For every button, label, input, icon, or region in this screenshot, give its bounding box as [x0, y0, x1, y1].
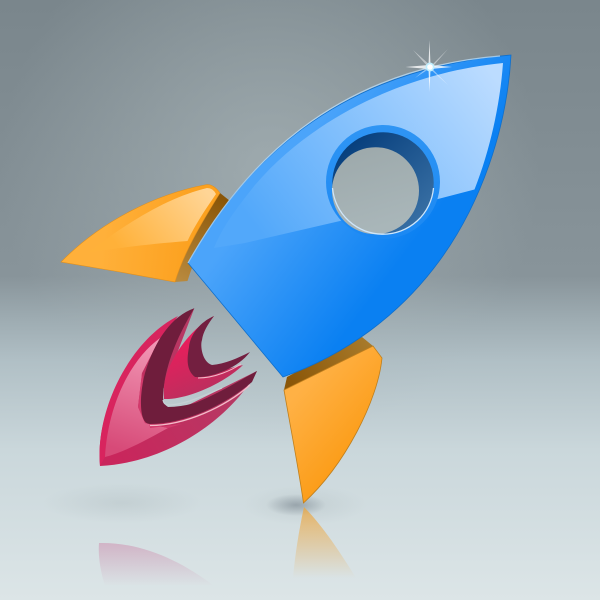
- fin side face: [284, 337, 373, 390]
- flame: [100, 308, 257, 466]
- reflection of fin and flame: [99, 507, 356, 586]
- window hole: [332, 132, 434, 234]
- flame light stroke: [150, 385, 250, 426]
- window rim light: [332, 188, 434, 234]
- fin side face: [175, 193, 230, 282]
- flame light gap: [163, 388, 222, 405]
- left fin: [61, 184, 230, 282]
- body main: [188, 55, 511, 377]
- bottom fin: [284, 337, 382, 503]
- window ring: [326, 125, 440, 239]
- window disc: [332, 147, 419, 234]
- flame left rim: [100, 316, 178, 466]
- flame dark band: [141, 308, 257, 424]
- glass highlight: [214, 63, 503, 248]
- flame outer: [100, 308, 257, 466]
- floor shadows: [42, 483, 367, 525]
- body top edge highlight: [188, 56, 500, 263]
- flame glossy highlight: [105, 338, 168, 457]
- inner flame dark: [188, 316, 250, 377]
- sparkle star: [406, 40, 452, 92]
- flame band rim: [138, 373, 182, 428]
- fin glass highlight: [88, 188, 216, 253]
- inner flame: [164, 316, 243, 399]
- rocket body: [188, 55, 511, 377]
- fin front face: [61, 184, 220, 282]
- fin front face: [284, 346, 382, 503]
- inner flame light stroke: [198, 364, 241, 378]
